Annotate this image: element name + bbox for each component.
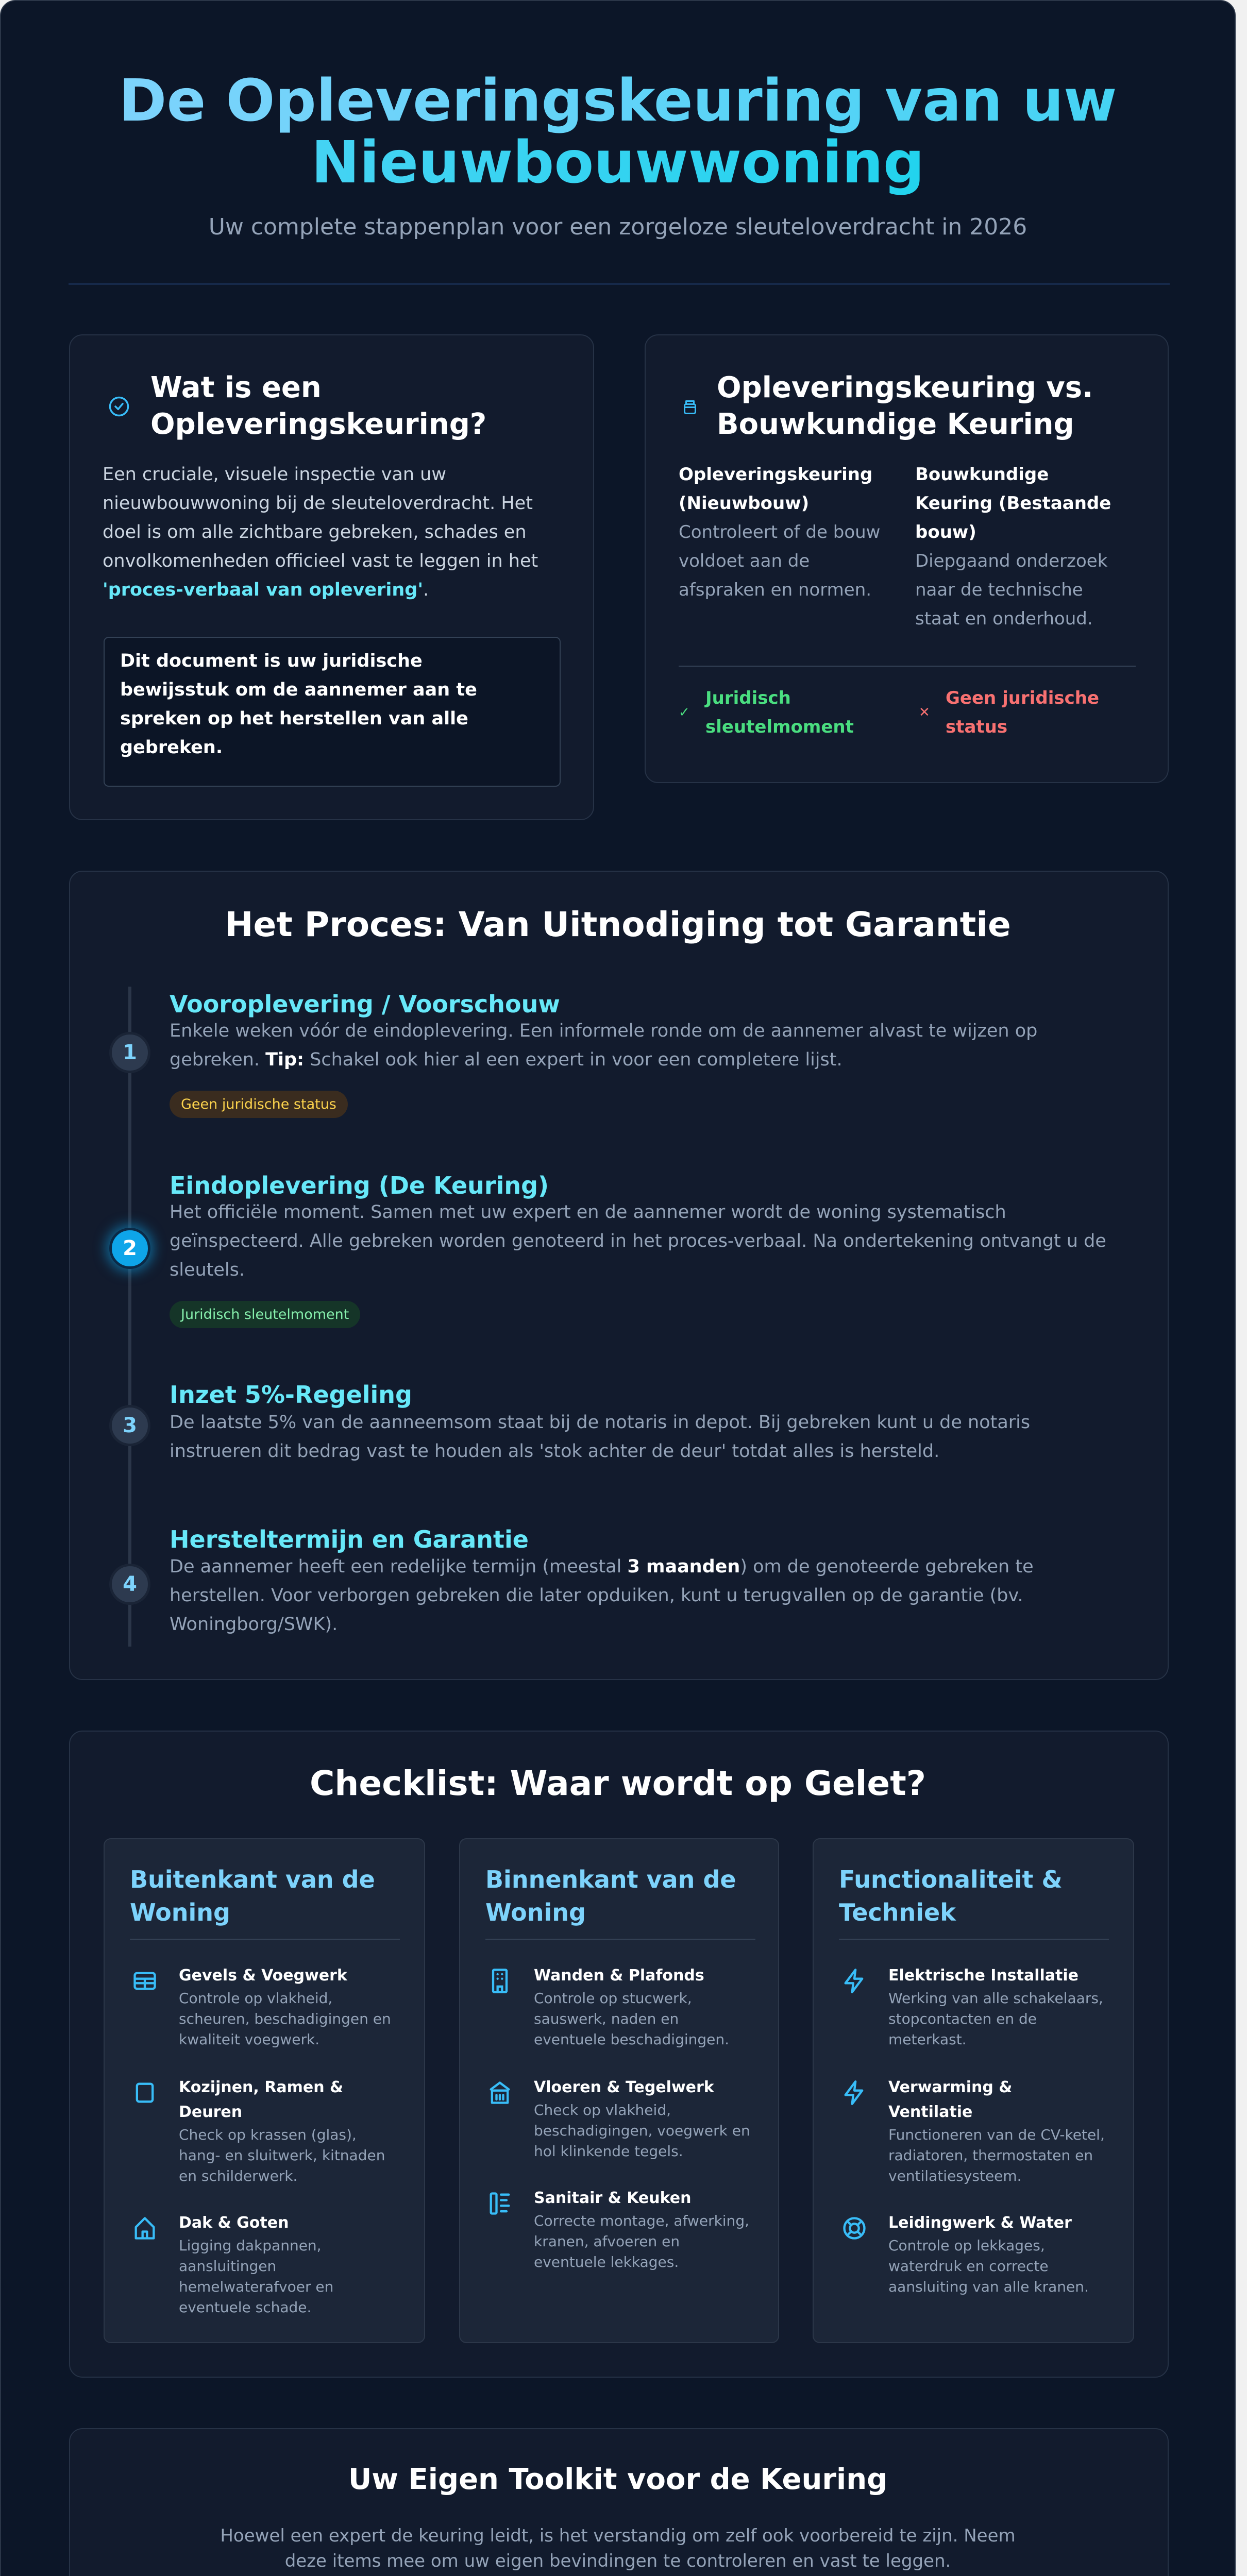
step 2: sleutels. xyxy=(170,1260,245,1280)
subtitle: Uw complete stappenplan voor een zorgeloze sleuteloverdracht in 2026 xyxy=(209,214,1027,240)
column: bouwkundige keuring: Diepgaand onderzoek xyxy=(915,551,1107,571)
status: geen juridische xyxy=(919,688,1099,737)
status: geen juridische: ✕ xyxy=(919,705,930,720)
column: bouwkundige keuring xyxy=(915,464,1111,629)
step 3: Inzet 5%-Regeling xyxy=(170,1381,412,1409)
callout: Dit document is uw juridische xyxy=(120,651,423,671)
item: gevels: Controle op vlakheid, xyxy=(179,1990,332,2007)
column: buitenkant: Buitenkant van de xyxy=(130,1866,375,1893)
item: elektra xyxy=(844,1967,1103,2048)
step 1: Vooroplevering / Voorschouw xyxy=(170,990,560,1018)
body text xyxy=(103,464,538,600)
panel: wat is een opleveringskeuring xyxy=(69,334,594,820)
status: geen juridische: Geen juridische xyxy=(946,688,1099,708)
step 2: Eindoplevering (De Keuring) xyxy=(170,1172,549,1199)
item: vloeren xyxy=(490,2078,750,2160)
status: juridisch xyxy=(679,688,854,737)
item: verwarming: Ventilatie xyxy=(888,2103,972,2121)
item: dak xyxy=(135,2214,333,2316)
item: elektra: stopcontacten en de xyxy=(888,2010,1037,2027)
toolkit text: Hoewel een expert de keuring leidt, is het verstandig om zelf ook voorbereid te zijn. Neem xyxy=(220,2526,1016,2546)
status: juridisch: Juridisch xyxy=(705,688,791,708)
item: sanitair: Sanitair & Keuken xyxy=(534,2189,691,2207)
item: wanden xyxy=(492,1967,729,2048)
step 1: Enkele weken vóór de eindoplevering. Een informele ronde om de aannemer alvast te wijzen op xyxy=(170,1021,1037,1041)
step 2: 2 xyxy=(123,1236,137,1260)
item: gevels: kwaliteit voegwerk. xyxy=(179,2031,319,2048)
heading: Wat is een xyxy=(150,371,322,404)
item: wanden: sauswerk, naden en xyxy=(534,2010,679,2027)
item: sanitair: kranen, afvoeren en xyxy=(534,2233,680,2250)
toolkit text: deze items mee om uw eigen bevindingen te controleren en vast te leggen. xyxy=(285,2551,951,2571)
item: vloeren: Check op vlakheid, xyxy=(534,2102,671,2119)
item: leidingwerk: aansluiting van alle kranen. xyxy=(888,2278,1089,2295)
item: sanitair xyxy=(490,2189,749,2270)
callout: gebreken. xyxy=(120,737,223,758)
item: kozijnen: Deuren xyxy=(179,2103,242,2121)
column: bouwkundige keuring: Bouwkundige xyxy=(915,464,1049,485)
item: elektra: Werking van alle schakelaars, xyxy=(888,1990,1103,2007)
column: opleveringskeuring: voldoet aan de xyxy=(679,551,810,571)
step 4 xyxy=(109,1526,1034,1635)
step 3: instrueren dit bedrag vast te houden als 'stok achter de deur' totdat alles is hersteld. xyxy=(170,1441,939,1462)
step 2: Het officiële moment. Samen met uw expert en de aannemer wordt de woning systematisch xyxy=(170,1202,1006,1223)
status: juridisch: sleutelmoment xyxy=(705,717,854,737)
item: kozijnen: Check op krassen (glas), xyxy=(179,2126,357,2143)
step 4: Woningborg/SWK). xyxy=(170,1614,338,1635)
step 2: Juridisch sleutelmoment xyxy=(181,1307,349,1323)
body text: doel is om alle zichtbare gebreken, schades en xyxy=(103,522,527,543)
toolkit heading: Uw Eigen Toolkit voor de Keuring xyxy=(348,2463,887,2496)
heading: Opleveringskeuring? xyxy=(150,408,486,441)
process heading: Het Proces: Van Uitnodiging tot Garantie xyxy=(225,905,1011,944)
item: verwarming: ventilatiesysteem. xyxy=(888,2167,1022,2184)
column: opleveringskeuring: afspraken en normen. xyxy=(679,580,871,600)
step 3 xyxy=(109,1381,1030,1462)
item: kozijnen xyxy=(136,2078,385,2184)
item: elektra: meterkast. xyxy=(888,2031,967,2048)
item: dak: Ligging dakpannen, xyxy=(179,2237,322,2254)
title: Nieuwbouwwoning xyxy=(311,129,924,196)
item: gevels: scheuren, beschadigingen en xyxy=(179,2010,391,2027)
item: wanden: Wanden & Plafonds xyxy=(534,1967,704,1985)
heading xyxy=(717,371,1093,441)
column: opleveringskeuring xyxy=(679,464,880,600)
step 3: 3 xyxy=(123,1414,137,1437)
step 1: gebreken. Tip: Schakel ook hier al een expert in voor een completere lijst. xyxy=(170,1049,842,1070)
item: dak: eventuele schade. xyxy=(179,2299,311,2316)
toolkit text xyxy=(220,2526,1016,2571)
callout xyxy=(104,637,561,787)
column: functionaliteit: Functionaliteit & xyxy=(839,1866,1063,1893)
body text: nieuwbouwwoning bij de sleuteloverdracht. Het xyxy=(103,493,533,514)
item: kozijnen: Kozijnen, Ramen & xyxy=(179,2078,343,2096)
column: opleveringskeuring: (Nieuwbouw) xyxy=(679,493,809,514)
column: buitenkant: Woning xyxy=(130,1899,230,1926)
step 2 xyxy=(99,1172,1106,1328)
item: sanitair: Correcte montage, afwerking, xyxy=(534,2212,749,2229)
panel: proces xyxy=(69,871,1169,1680)
item: gevels: Gevels & Voegwerk xyxy=(179,1967,347,1985)
callout: spreken op het herstellen van alle xyxy=(120,708,468,729)
item: vloeren: hol klinkende tegels. xyxy=(534,2143,683,2160)
column: bouwkundige keuring: staat en onderhoud. xyxy=(915,608,1093,629)
callout: bewijsstuk om de aannemer aan te xyxy=(120,680,477,700)
item: wanden: Controle op stucwerk, xyxy=(534,1990,692,2007)
heading: Opleveringskeuring vs. xyxy=(717,371,1093,404)
item: vloeren: Vloeren & Tegelwerk xyxy=(534,2078,714,2096)
item: leidingwerk: Controle op lekkages, xyxy=(888,2237,1045,2254)
column: opleveringskeuring: Controleert of de bouw xyxy=(679,522,880,543)
item: leidingwerk: waterdruk en correcte xyxy=(888,2258,1049,2275)
column: bouwkundige keuring: Keuring (Bestaande xyxy=(915,493,1111,514)
panel: toolkit xyxy=(69,2428,1169,2576)
item: dak: aansluitingen xyxy=(179,2258,276,2275)
panel: checklist xyxy=(69,1731,1169,2378)
step 1 xyxy=(109,990,1037,1118)
item: leidingwerk xyxy=(843,2214,1089,2295)
column: bouwkundige keuring: bouw) xyxy=(915,522,976,543)
body text: 'proces-verbaal van oplevering'. xyxy=(103,580,429,600)
item: dak: Dak & Goten xyxy=(179,2214,289,2232)
item: verwarming: radiatoren, thermostaten en xyxy=(888,2147,1093,2164)
panel: vergelijking xyxy=(645,334,1169,783)
column: binnenkant: Binnenkant van de xyxy=(485,1866,736,1893)
item: vloeren: beschadigingen, voegwerk en xyxy=(534,2122,750,2139)
status: juridisch: ✓ xyxy=(679,705,690,720)
step 4: 4 xyxy=(123,1572,137,1596)
body text: Een cruciale, visuele inspectie van uw xyxy=(103,464,446,485)
item: verwarming: Functioneren van de CV-ketel, xyxy=(888,2126,1105,2143)
item: wanden: eventuele beschadigingen. xyxy=(534,2031,729,2048)
checklist heading: Checklist: Waar wordt op Gelet? xyxy=(310,1764,926,1803)
title xyxy=(119,67,1117,196)
item: verwarming xyxy=(844,2078,1105,2184)
step 2: geïnspecteerd. Alle gebreken worden genoteerd in het proces-verbaal. Na ondertekening ontvangt u de xyxy=(170,1231,1106,1251)
icon: jar xyxy=(684,400,696,414)
column: functionaliteit: Techniek xyxy=(839,1899,956,1926)
step 1: 1 xyxy=(123,1041,137,1064)
heading xyxy=(150,371,486,441)
heading: Bouwkundige Keuring xyxy=(717,408,1074,441)
item: dak: hemelwaterafvoer en xyxy=(179,2278,333,2295)
column: opleveringskeuring: Opleveringskeuring xyxy=(679,464,872,485)
step 4: Hersteltermijn en Garantie xyxy=(170,1526,529,1553)
step 4: De aannemer heeft een redelijke termijn (meestal 3 maanden) om de genoteerde gebreken te xyxy=(170,1556,1034,1577)
step 4: herstellen. Voor verborgen gebreken die later opduiken, kunt u terugvallen op de garantie (bv. xyxy=(170,1585,1023,1606)
icon: check circle xyxy=(109,397,129,416)
body text: onvolkomenheden officieel vast te leggen in het xyxy=(103,551,538,571)
column: binnenkant xyxy=(459,1838,779,2343)
step 3: De laatste 5% van de aanneemsom staat bij de notaris in depot. Bij gebreken kunt u de notaris xyxy=(170,1412,1030,1433)
step 1: Geen juridische status xyxy=(181,1096,336,1112)
column: buitenkant xyxy=(104,1838,425,2343)
column: binnenkant: Woning xyxy=(485,1899,586,1926)
item: sanitair: eventuele lekkages. xyxy=(534,2253,679,2270)
status: geen juridische: status xyxy=(946,717,1007,737)
item: verwarming: Verwarming & xyxy=(888,2078,1012,2096)
item: kozijnen: en schilderwerk. xyxy=(179,2167,297,2184)
item: kozijnen: hang- en sluitwerk, kitnaden xyxy=(179,2147,385,2164)
item: elektra: Elektrische Installatie xyxy=(888,1967,1079,1985)
title: De Opleveringskeuring van uw xyxy=(119,67,1117,134)
item: leidingwerk: Leidingwerk & Water xyxy=(888,2214,1072,2232)
column: functionaliteit xyxy=(813,1838,1134,2343)
column: bouwkundige keuring: naar de technische xyxy=(915,580,1083,600)
item: gevels xyxy=(133,1967,391,2048)
